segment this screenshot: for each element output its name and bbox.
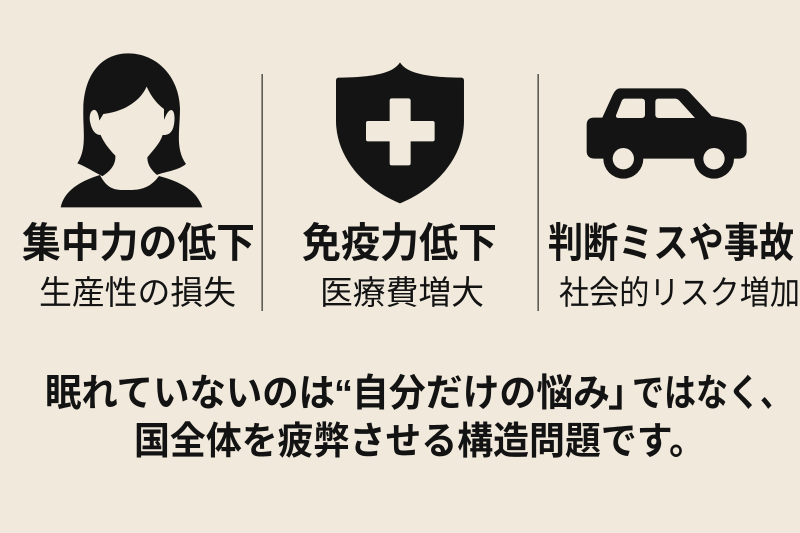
text: conclusion line 1: “ xyxy=(334,373,353,415)
panel: concentration decline xyxy=(22,53,255,311)
text: conclusion line 1: 」 xyxy=(608,373,646,415)
text: conclusion line 1: 自分だけの悩み xyxy=(352,373,610,415)
panel: misjudgment and accidents xyxy=(548,88,800,311)
text: 医療費増大: 医療費増大 xyxy=(320,274,484,311)
icon: woman silhouette xyxy=(61,53,202,207)
panel: immunity decline xyxy=(302,62,497,311)
icon: shield with cross xyxy=(336,62,464,203)
text: conclusion line 1 xyxy=(45,373,792,415)
icon: car xyxy=(587,88,747,179)
conclusion text xyxy=(45,373,792,463)
text: 生産性の損失: 生産性の損失 xyxy=(39,274,236,311)
text: conclusion line 1: 眠れていないのは xyxy=(45,373,335,415)
heading: 免疫力低下: 免疫力低下 xyxy=(302,220,497,266)
heading: 集中力の低下: 集中力の低下 xyxy=(22,220,255,266)
text: conclusion line 2: 国全体を疲弊させる構造問題です。 xyxy=(134,421,705,463)
